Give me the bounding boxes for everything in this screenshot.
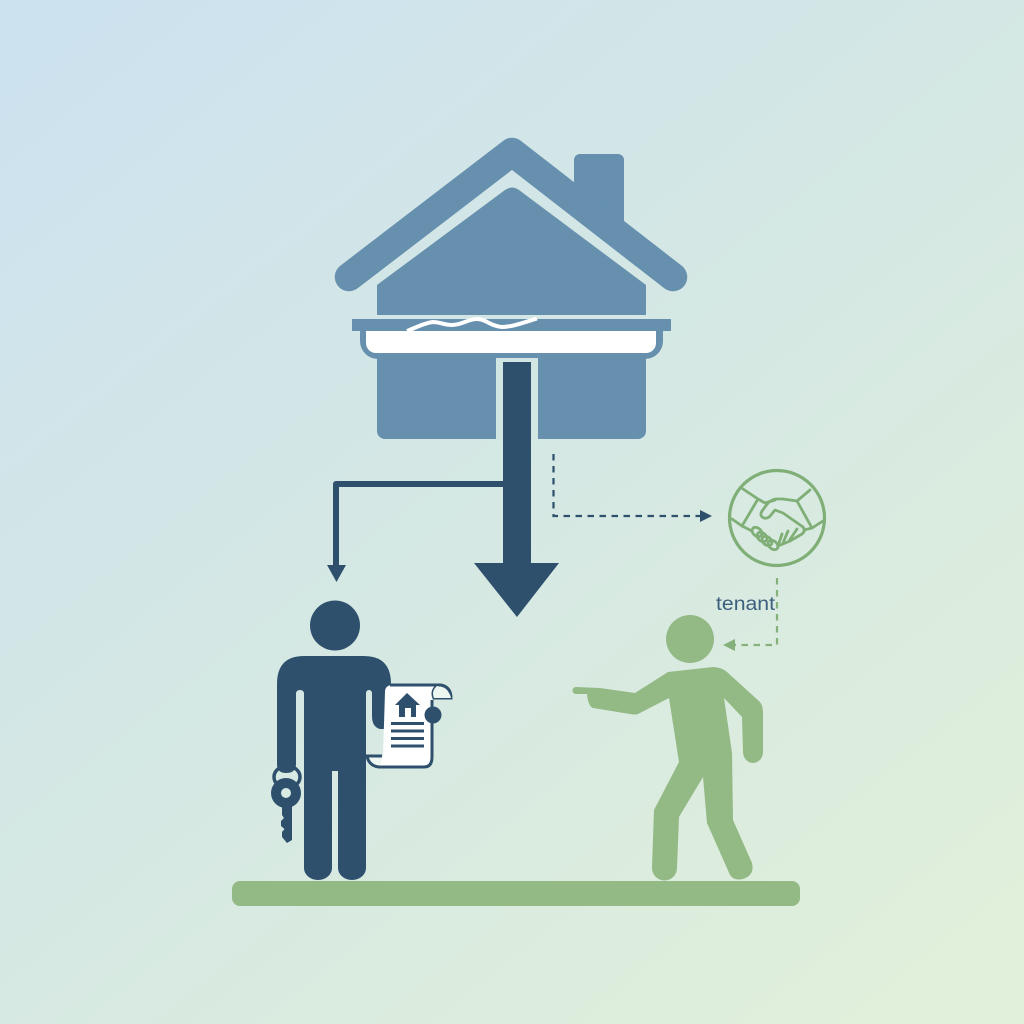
slot behind downspout bbox=[496, 358, 538, 440]
arrow: large downspout arrow bbox=[474, 362, 559, 617]
gutter trough bbox=[360, 328, 663, 359]
arrow: dashed to handshake bbox=[554, 454, 712, 522]
document lines bbox=[391, 724, 424, 746]
label: tenant: tenant bbox=[716, 594, 776, 615]
landlord body bbox=[277, 656, 391, 880]
gutter white interior bbox=[366, 330, 656, 353]
landlord head bbox=[310, 600, 360, 650]
arrow: dashed to tenant bbox=[723, 578, 777, 651]
tenant head bbox=[666, 615, 714, 663]
arrow: branch to landlord bbox=[327, 484, 503, 582]
figure: landlord bbox=[271, 600, 451, 880]
scroll document bbox=[367, 685, 451, 767]
icon: handshake in circle bbox=[730, 470, 824, 566]
mini house icon bbox=[395, 693, 420, 717]
icon: house with gutter bbox=[349, 152, 673, 440]
figure: tenant pointing bbox=[573, 615, 763, 880]
tenant body bbox=[573, 667, 763, 880]
upper wall bbox=[377, 188, 646, 315]
lower wall bbox=[377, 350, 646, 439]
gutter rim bbox=[352, 319, 671, 331]
chimney bbox=[574, 154, 624, 239]
keys bbox=[271, 766, 301, 843]
thumb bbox=[424, 706, 442, 724]
ground bar bbox=[232, 881, 800, 906]
roof bbox=[349, 152, 673, 277]
overflowing water wave bbox=[407, 318, 537, 331]
